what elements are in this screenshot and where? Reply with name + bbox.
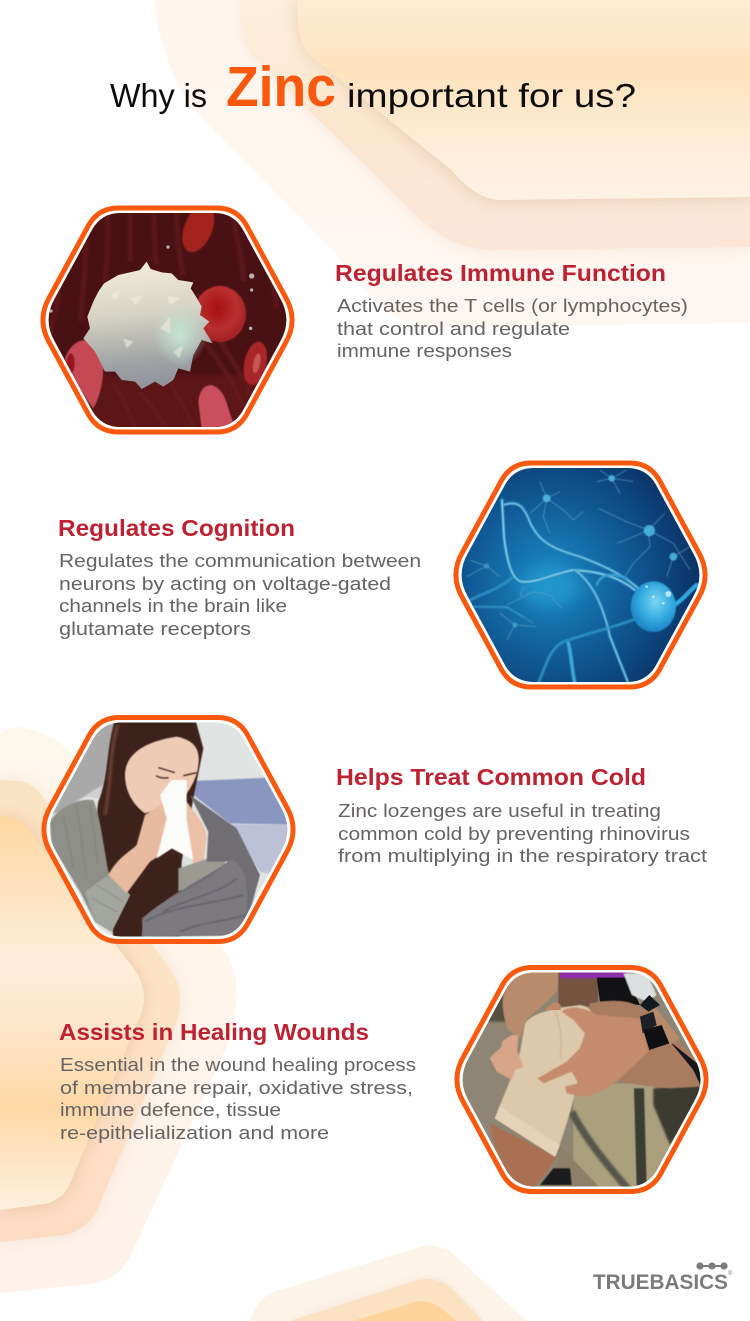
description — [337, 296, 688, 361]
description: channels in the brain like — [59, 596, 287, 616]
title — [110, 55, 636, 119]
panel: helps treat common cold — [40, 715, 707, 948]
description: common cold by preventing rhinovirus — [338, 824, 690, 844]
description: Zinc lozenges are useful in treating — [338, 801, 661, 821]
title: Zinc — [226, 55, 336, 119]
description: from multiplying in the respiratory tract — [338, 846, 707, 866]
description: immune defence, tissue — [60, 1100, 281, 1120]
background: top-right peach hexagon layers — [154, 0, 750, 327]
panel: regulates immune function — [40, 200, 688, 438]
title: Why is — [110, 77, 207, 114]
logo: TrueBasics: ® — [728, 1270, 733, 1277]
hexagon photo: woman blowing nose — [40, 715, 300, 948]
heading: Helps Treat Common Cold — [336, 764, 646, 790]
description: re-epithelialization and more — [60, 1123, 329, 1143]
description — [338, 801, 707, 866]
background: left peach hexagon layers — [0, 727, 236, 1293]
hexagon photo: bandaged knee — [450, 965, 713, 1198]
panel: assists in healing wounds — [59, 965, 713, 1198]
heading: Regulates Immune Function — [335, 260, 666, 286]
hexagon photo: neurons — [450, 460, 713, 693]
background: bottom peach hexagon layers — [250, 1246, 527, 1321]
hexagon photo: white blood cell — [40, 200, 300, 438]
description: Regulates the communication between — [59, 551, 421, 571]
description: Essential in the wound healing process — [60, 1055, 416, 1075]
logo: TrueBasics: TRUEBASICS — [593, 1271, 728, 1294]
description: of membrane repair, oxidative stress, — [60, 1078, 413, 1098]
description: immune responses — [337, 341, 512, 361]
description: that control and regulate — [337, 319, 570, 339]
description: Activates the T cells (or lymphocytes) — [337, 296, 688, 316]
description — [59, 551, 421, 639]
heading: Assists in Healing Wounds — [59, 1019, 369, 1045]
panel: regulates cognition — [58, 460, 713, 693]
description: glutamate receptors — [59, 619, 251, 639]
description — [60, 1055, 416, 1143]
title: important for us? — [347, 77, 636, 114]
description: neurons by acting on voltage-gated — [59, 574, 391, 594]
heading: Regulates Cognition — [58, 515, 295, 541]
